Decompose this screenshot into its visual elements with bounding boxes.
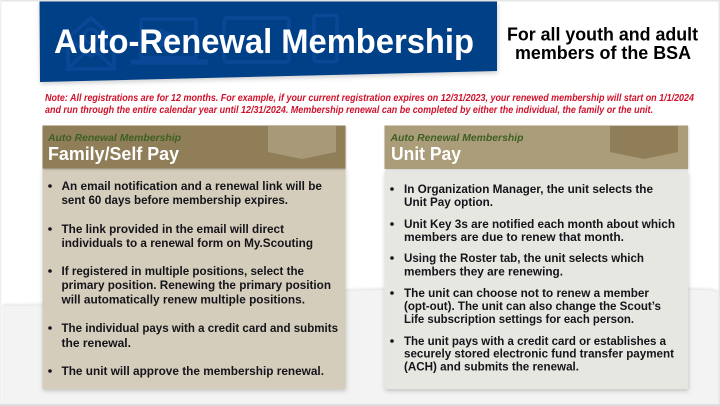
right panel bullet list: Life subscription settings for each person. — [404, 312, 634, 326]
panel: unit pay — [384, 126, 688, 389]
right panel bullet list: Unit Key 3s are notified each month about which — [404, 217, 675, 231]
title banner — [40, 2, 497, 82]
right panel bullet list: (ACH) and submits the renewal. — [404, 360, 579, 374]
icon: chevron tab — [610, 126, 678, 159]
left panel bullet list: sent 60 days before membership expires. — [62, 193, 288, 207]
right panel bullet list: securely stored electronic fund transfer payment — [404, 346, 674, 360]
left panel bullet list: The link provided in the email will direct — [62, 222, 284, 236]
left panel bullet list: the renewal. — [62, 336, 131, 350]
left panel bullet list: An email notification and a renewal link will be — [62, 179, 322, 193]
left panel bullet list: The unit will approve the membership renewal. — [62, 364, 324, 378]
left panel bullet list: The individual pays with a credit card and submits — [62, 321, 338, 335]
registration note: and run through the entire calendar year until 12/31/2024. Membership renewal can be completed by either the individual, the family or the unit. — [45, 105, 653, 116]
icon: chevron tab — [268, 126, 336, 159]
left panel bullet list: primary position. Renewing the primary position — [62, 278, 331, 292]
audience text: members of the BSA — [515, 43, 691, 63]
right panel subheading: Auto Renewal Membership — [389, 133, 524, 144]
title text: Auto-Renewal Membership — [54, 23, 474, 61]
right panel heading: Unit Pay — [391, 143, 462, 164]
left panel body — [42, 168, 346, 389]
icon: phone — [314, 16, 337, 62]
panel: family/self pay — [42, 126, 346, 389]
left panel bullet list: individuals to a renewal form on My.Scouting — [62, 236, 313, 250]
registration note — [45, 93, 695, 116]
right panel bullet list — [390, 182, 675, 374]
left panel bullet list — [48, 179, 338, 378]
right panel bullet list: Unit Pay option. — [404, 195, 493, 209]
right panel bullet list: members are due to renew that month. — [404, 230, 624, 244]
left panel subheading: Auto Renewal Membership — [47, 133, 181, 144]
right panel bullet list: The unit can choose not to renew a member — [404, 286, 649, 300]
left panel header — [42, 126, 346, 168]
right panel bullet list: The unit pays with a credit card or establishes a — [404, 334, 666, 348]
left panel bullet list: If registered in multiple positions, select the — [62, 264, 304, 278]
audience text — [507, 24, 698, 63]
right panel bullet list: members they are renewing. — [404, 264, 563, 278]
icon: envelope — [68, 18, 114, 69]
right panel body — [384, 171, 688, 389]
icon: laptop — [131, 19, 208, 62]
right panel bullet list: Using the Roster tab, the unit selects which — [404, 251, 644, 265]
left panel heading: Family/Self Pay — [48, 143, 180, 164]
icon: tablet — [224, 18, 289, 62]
right panel bullet list: In Organization Manager, the unit selects the — [404, 182, 653, 196]
audience text: For all youth and adult — [507, 24, 698, 44]
right panel bullet list: (opt-out). The unit can also change the Scout’s — [404, 299, 661, 313]
left panel bullet list: will automatically renew multiple positions. — [61, 292, 305, 306]
right panel header — [384, 126, 688, 169]
